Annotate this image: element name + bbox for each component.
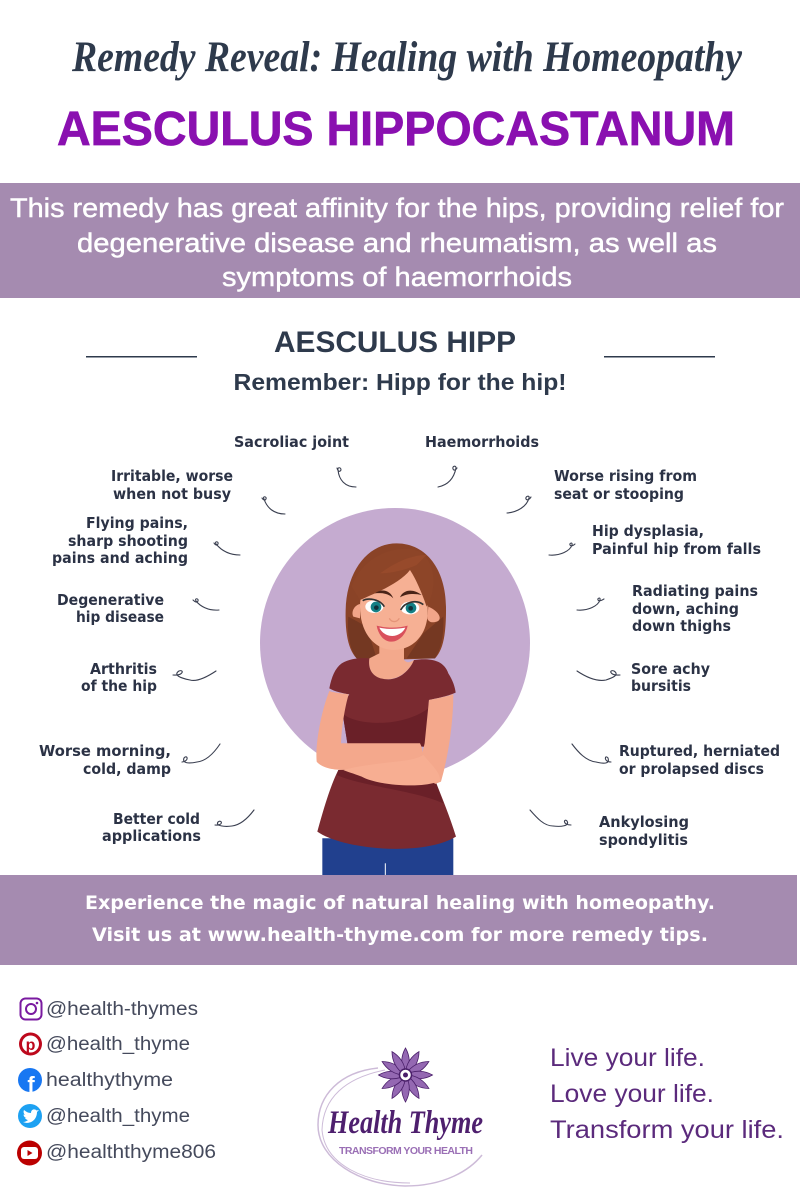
panel: remedy summary band: symptoms of haemorrhoids (222, 262, 572, 292)
symptom labels, right side: Ruptured, herniated (619, 742, 780, 760)
tagline: Live your life: Transform your life. (550, 1116, 784, 1144)
panel: call-to-action band (0, 875, 797, 965)
symptom labels, right side: Worse rising from (554, 467, 697, 485)
text: facebook handle: healthythyme (46, 1070, 173, 1091)
symptom labels, right side: down, aching (632, 600, 739, 618)
icon: facebook (18, 1068, 42, 1097)
panel: call-to-action band: Visit us at www.health-thyme.com for more remedy tips. (92, 924, 708, 946)
left arm (316, 691, 423, 770)
symptom labels, left side: sharp shooting (68, 532, 188, 550)
logo tagline: TRANSFORM YOUR HEALTH (339, 1145, 473, 1157)
symptom labels, left side: applications (102, 827, 201, 845)
symptom labels, right side: Sore achy (631, 660, 710, 678)
brows (375, 591, 393, 598)
panel: remedy summary band: degenerative disease and rheumatism, as well as (77, 228, 717, 258)
text: youtube handle: @healththyme806 (46, 1142, 216, 1163)
face (360, 568, 428, 650)
symptom labels, right side: Radiating pains (632, 582, 758, 600)
icon: twitter (18, 1104, 42, 1128)
symptom labels, right side: or prolapsed discs (619, 760, 764, 778)
symptom labels, right side (425, 433, 780, 849)
text: twitter handle: @health_thyme (46, 1106, 190, 1127)
nose (389, 618, 399, 622)
symptom labels, right side: Hip dysplasia, (592, 522, 704, 540)
text: pinterest handle: @health_thyme (46, 1034, 190, 1055)
shirt lower (317, 767, 456, 849)
text: instagram handle: @health-thymes (46, 999, 198, 1020)
circle behind woman (260, 508, 530, 778)
symptom labels, right side: Ankylosing (599, 813, 689, 831)
symptom labels, left side: Arthritis (90, 660, 157, 678)
icon: youtube (17, 1140, 42, 1166)
symptom labels, left side: when not busy (113, 485, 231, 503)
squiggle connector arrows (173, 466, 620, 826)
mouth (377, 626, 408, 642)
symptom labels, left side: of the hip (81, 677, 157, 695)
illustration: woman with crossed arms (316, 543, 456, 875)
symptom labels, left side: Sacroliac joint (234, 433, 350, 451)
symptom labels, left side: cold, damp (83, 760, 171, 778)
tagline: Live your life: Live your life. (550, 1044, 705, 1072)
symptom labels, left side (39, 433, 350, 845)
icon: facebook: f (27, 1072, 35, 1097)
logo swoosh (318, 1068, 482, 1186)
panel: remedy summary band: This remedy has great affinity for the hips, providing relief for (10, 193, 784, 223)
heading: Aesculus Hipp: AESCULUS HIPP (274, 326, 516, 359)
eyes (365, 600, 383, 613)
symptom labels, left side: Better cold (113, 810, 200, 828)
icon: instagram (20, 998, 42, 1020)
tagline: Live your life: Love your life. (550, 1080, 714, 1108)
neck (369, 643, 414, 679)
shirt upper (329, 658, 456, 747)
right arm (420, 694, 453, 784)
symptom labels, left side: Degenerative (57, 591, 164, 609)
symptom labels, right side: seat or stooping (554, 485, 684, 503)
panel: call-to-action band: Experience the magic of natural healing with homeopathy. (85, 892, 715, 914)
symptom labels, left side: pains and aching (52, 549, 188, 567)
logo wordmark: Health Thyme (327, 1105, 483, 1141)
symptom labels, left side: Irritable, worse (111, 467, 233, 485)
fringe (352, 549, 433, 607)
logo: Health Thyme (318, 1048, 483, 1186)
icon: pinterest: p (26, 1037, 36, 1054)
hair back (346, 543, 446, 659)
panel: remedy summary band (0, 183, 800, 298)
symptom labels, right side: Haemorrhoids (425, 433, 539, 451)
heading: remedy name: AESCULUS HIPPOCASTANUM (57, 103, 735, 156)
icon: pinterest (19, 1032, 42, 1056)
symptom labels, left side: hip disease (76, 608, 164, 626)
tagline: Live your life (550, 1044, 784, 1144)
subheading: Remember: Remember: Hipp for the hip! (234, 369, 566, 395)
symptom labels, right side: Painful hip from falls (592, 540, 761, 558)
symptom labels, left side: Flying pains, (86, 514, 188, 532)
symptom labels, right side: down thighs (632, 617, 731, 635)
symptom labels, right side: spondylitis (599, 831, 688, 849)
symptom labels, left side: Worse morning, (39, 742, 171, 760)
logo flower (378, 1048, 432, 1102)
jeans (322, 838, 453, 875)
symptom labels, right side: bursitis (631, 677, 691, 695)
